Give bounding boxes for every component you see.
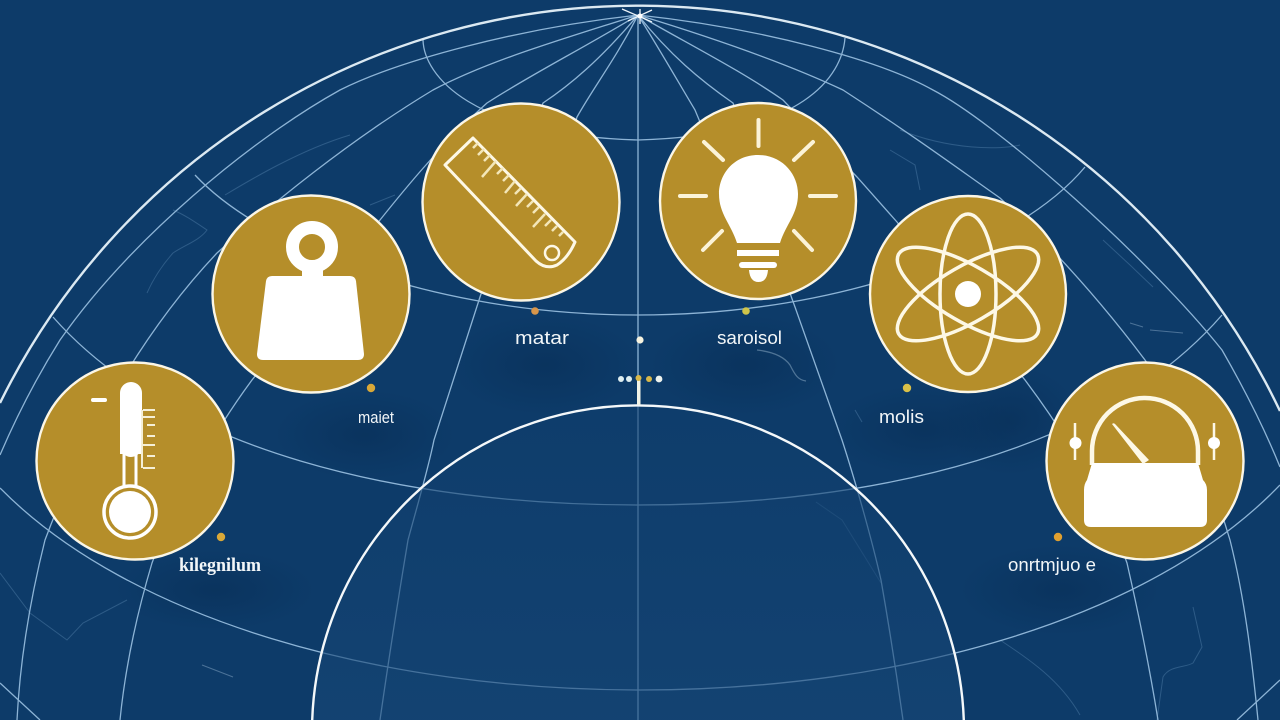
label dot: thermometer (217, 533, 225, 541)
label dot: weight (367, 384, 375, 392)
label: light bulb: saroisol (717, 328, 782, 348)
label: ruler: matar (515, 328, 569, 348)
icon: atom (870, 196, 1066, 392)
centre marker dots (618, 336, 662, 405)
icon: weight (212, 196, 410, 392)
icon: thermometer (36, 362, 234, 560)
label dot: ruler (531, 307, 539, 315)
pole star (622, 9, 652, 24)
label: atom: molis (879, 407, 924, 427)
label dot: light bulb (742, 307, 750, 315)
label shadows (115, 315, 1160, 635)
inner globe arc (312, 405, 964, 720)
inner globe disc (312, 405, 964, 720)
icon: light bulb (660, 103, 856, 299)
faint map traces (0, 130, 1202, 720)
label dot: gauge (1054, 533, 1062, 541)
label: thermometer: kilegnilum (179, 555, 261, 576)
label dot: atom (903, 384, 911, 392)
outer globe arc (0, 6, 1280, 411)
label: weight: maiet (358, 408, 394, 427)
label: gauge: onrtmjuo e (1008, 555, 1096, 575)
icon: ruler (422, 104, 620, 300)
icon: gauge (1046, 362, 1244, 560)
